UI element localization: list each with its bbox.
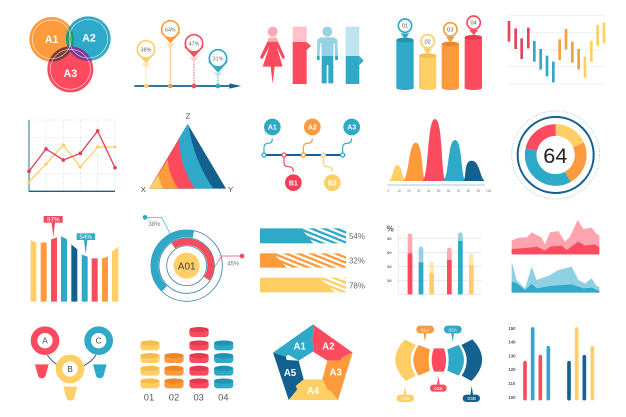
- label 03B: 03B: [468, 396, 476, 401]
- grouped bar chart: [387, 224, 482, 294]
- gender comparison chart: [260, 27, 364, 84]
- segment A3: A3: [329, 368, 342, 379]
- y labels: [508, 326, 516, 400]
- pin 31%: 31%: [213, 56, 224, 62]
- cylinder chart: [396, 16, 482, 90]
- column 01: [140, 340, 160, 388]
- x axis: 50: [437, 189, 441, 193]
- node A1: A1: [268, 125, 277, 132]
- line chart: [27, 120, 117, 191]
- y labels: 20: [387, 278, 392, 283]
- leader 45%: 45%: [227, 262, 240, 268]
- axis labels: [141, 112, 233, 194]
- node A: A: [42, 336, 48, 346]
- y labels: [387, 236, 392, 283]
- connector timeline: [262, 119, 360, 191]
- x axis: 100: [486, 189, 492, 193]
- bar 54%: 54%: [349, 232, 365, 241]
- density chart: [387, 119, 492, 193]
- column 02: [164, 353, 184, 388]
- cylinder 02: 02: [425, 39, 431, 45]
- candlestick chart: [507, 15, 606, 84]
- column 04: [214, 340, 233, 388]
- y labels: 60: [387, 250, 392, 255]
- y labels: 80: [387, 236, 392, 241]
- pin 47%: 47%: [189, 41, 200, 47]
- center label: A01: [178, 261, 196, 272]
- callout 54%: 54%: [79, 234, 92, 241]
- venn labels: A1: [45, 34, 59, 46]
- segment A1: A1: [293, 341, 306, 352]
- callout 87%: 87%: [47, 217, 60, 224]
- arched segment chart: [395, 326, 482, 402]
- icon: woman: [260, 27, 285, 84]
- column labels: [144, 393, 229, 403]
- node A3: A3: [347, 125, 356, 132]
- axis labels: X: [141, 185, 146, 194]
- icon: man: [317, 27, 338, 83]
- label 02A: 02A: [449, 327, 458, 332]
- column labels: 02: [169, 393, 179, 403]
- pin timeline chart: [134, 21, 241, 89]
- x axis: 90: [477, 189, 480, 193]
- cylinder 03: 03: [447, 27, 453, 33]
- x axis: 10: [397, 189, 401, 193]
- pin 64%: 64%: [165, 27, 176, 33]
- node B: B: [67, 364, 73, 374]
- x axis: 20: [407, 189, 411, 193]
- grouped bar chart: %: [387, 224, 394, 233]
- x axis: 60: [447, 189, 451, 193]
- donut gauge: [512, 111, 600, 199]
- venn labels: [45, 33, 96, 80]
- x axis: 30: [417, 189, 421, 193]
- node A2: A2: [308, 125, 317, 132]
- triangle chart: [141, 112, 233, 194]
- tapered bar chart: [31, 216, 118, 302]
- node B1: B1: [289, 180, 298, 187]
- leader 38%: 38%: [148, 222, 161, 228]
- x axis: 40: [427, 189, 431, 193]
- axis labels: Z: [186, 112, 191, 121]
- bar 78%: 78%: [349, 282, 365, 291]
- y labels: 150: [508, 326, 516, 331]
- column labels: 04: [218, 393, 229, 403]
- rounded bar chart: [508, 326, 592, 400]
- area chart: teal: [512, 262, 599, 293]
- venn diagram: [29, 16, 111, 92]
- column labels: 01: [144, 393, 154, 403]
- y labels: 140: [508, 340, 516, 345]
- venn labels: A2: [82, 33, 96, 45]
- venn labels: A3: [64, 68, 77, 80]
- y labels: 110: [508, 381, 516, 386]
- y labels: 130: [508, 354, 516, 359]
- pin 38%: 38%: [141, 47, 152, 53]
- axis labels: Y: [228, 185, 233, 194]
- y labels: 40: [387, 264, 392, 269]
- label 01A: 01A: [421, 327, 430, 332]
- node B2: B2: [328, 180, 337, 187]
- radial chart: [143, 215, 244, 301]
- x axis: 70: [457, 189, 460, 193]
- area chart: red: [512, 220, 599, 254]
- stacked disk chart: [140, 327, 233, 403]
- cylinder 04: 04: [471, 21, 477, 27]
- bar 32%: 32%: [349, 257, 365, 266]
- column 03: [189, 327, 209, 388]
- x axis: [387, 185, 492, 193]
- hatched progress bars: [260, 228, 365, 292]
- y labels: 100: [508, 395, 516, 400]
- y labels: 120: [508, 367, 516, 372]
- abc cup diagram: [34, 330, 110, 401]
- x axis: 0: [387, 189, 389, 193]
- bar: women: [293, 27, 311, 84]
- donut gauge: 64: [543, 143, 567, 168]
- column labels: 03: [193, 393, 204, 403]
- label 01B: 01B: [401, 396, 409, 401]
- x axis: 80: [467, 189, 470, 193]
- segment A4: A4: [307, 386, 320, 397]
- bar: men: [346, 27, 364, 84]
- label 02B: 02B: [434, 386, 442, 391]
- segment A5: A5: [284, 368, 297, 379]
- node C: C: [96, 336, 102, 346]
- segment A2: A2: [322, 341, 335, 352]
- pentagon chart: [273, 324, 353, 400]
- cylinder 01: 01: [402, 24, 408, 30]
